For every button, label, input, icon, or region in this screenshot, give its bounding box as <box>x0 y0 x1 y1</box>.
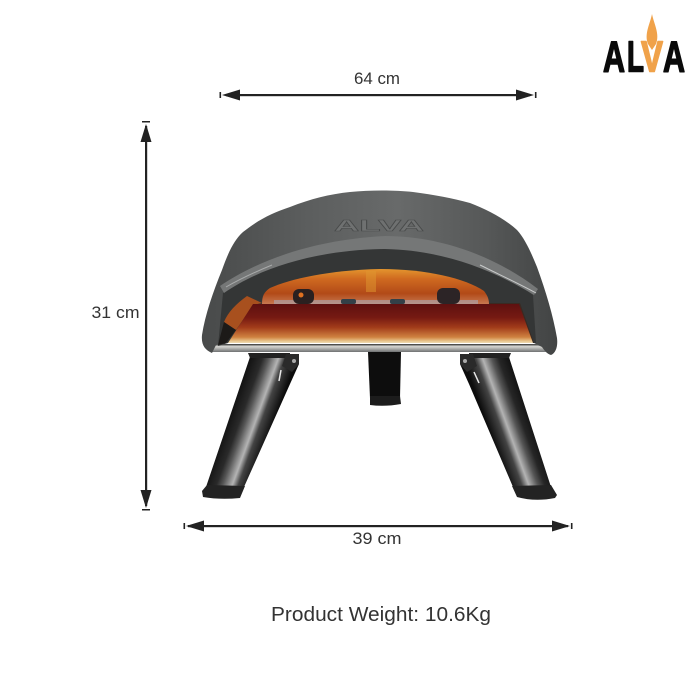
logo wordmark: A <box>663 32 685 82</box>
logo: ALVA <box>603 14 685 82</box>
arrow: left height <box>140 121 152 510</box>
logo wordmark <box>603 32 685 82</box>
left leg <box>202 353 299 499</box>
oven shell <box>202 190 557 355</box>
oven back wall flames <box>262 269 489 304</box>
arrow: bottom base <box>184 520 572 532</box>
pizza oven <box>202 190 557 500</box>
logo wordmark: V <box>641 32 663 82</box>
band highlight right <box>480 265 536 293</box>
baking stone <box>228 304 533 343</box>
logo wordmark: A <box>603 32 625 82</box>
arrow: top width <box>220 90 536 100</box>
logo flame <box>647 14 657 50</box>
back leg <box>368 352 401 406</box>
metal base strip <box>212 344 546 352</box>
band highlight left <box>226 265 272 287</box>
lighter shell band <box>220 236 538 295</box>
dark inner arch <box>218 248 536 346</box>
logo wordmark: L <box>627 32 644 82</box>
right inner side wall <box>489 303 534 343</box>
product weight: Product Weight: 10.6Kg <box>271 603 491 626</box>
brand embossed on shell: ALVA <box>334 218 425 235</box>
left inner side wall <box>218 296 262 345</box>
dimension: width 64 cm <box>220 70 536 100</box>
label: 31 cm: 31 cm <box>92 304 140 322</box>
label: 64 cm: 64 cm <box>354 70 400 88</box>
right leg <box>460 353 557 500</box>
label: 39 cm: 39 cm <box>352 530 402 548</box>
dimension: height 31 cm <box>92 121 152 510</box>
burner dark shapes <box>293 289 314 304</box>
dimension: base 39 cm <box>184 520 572 548</box>
